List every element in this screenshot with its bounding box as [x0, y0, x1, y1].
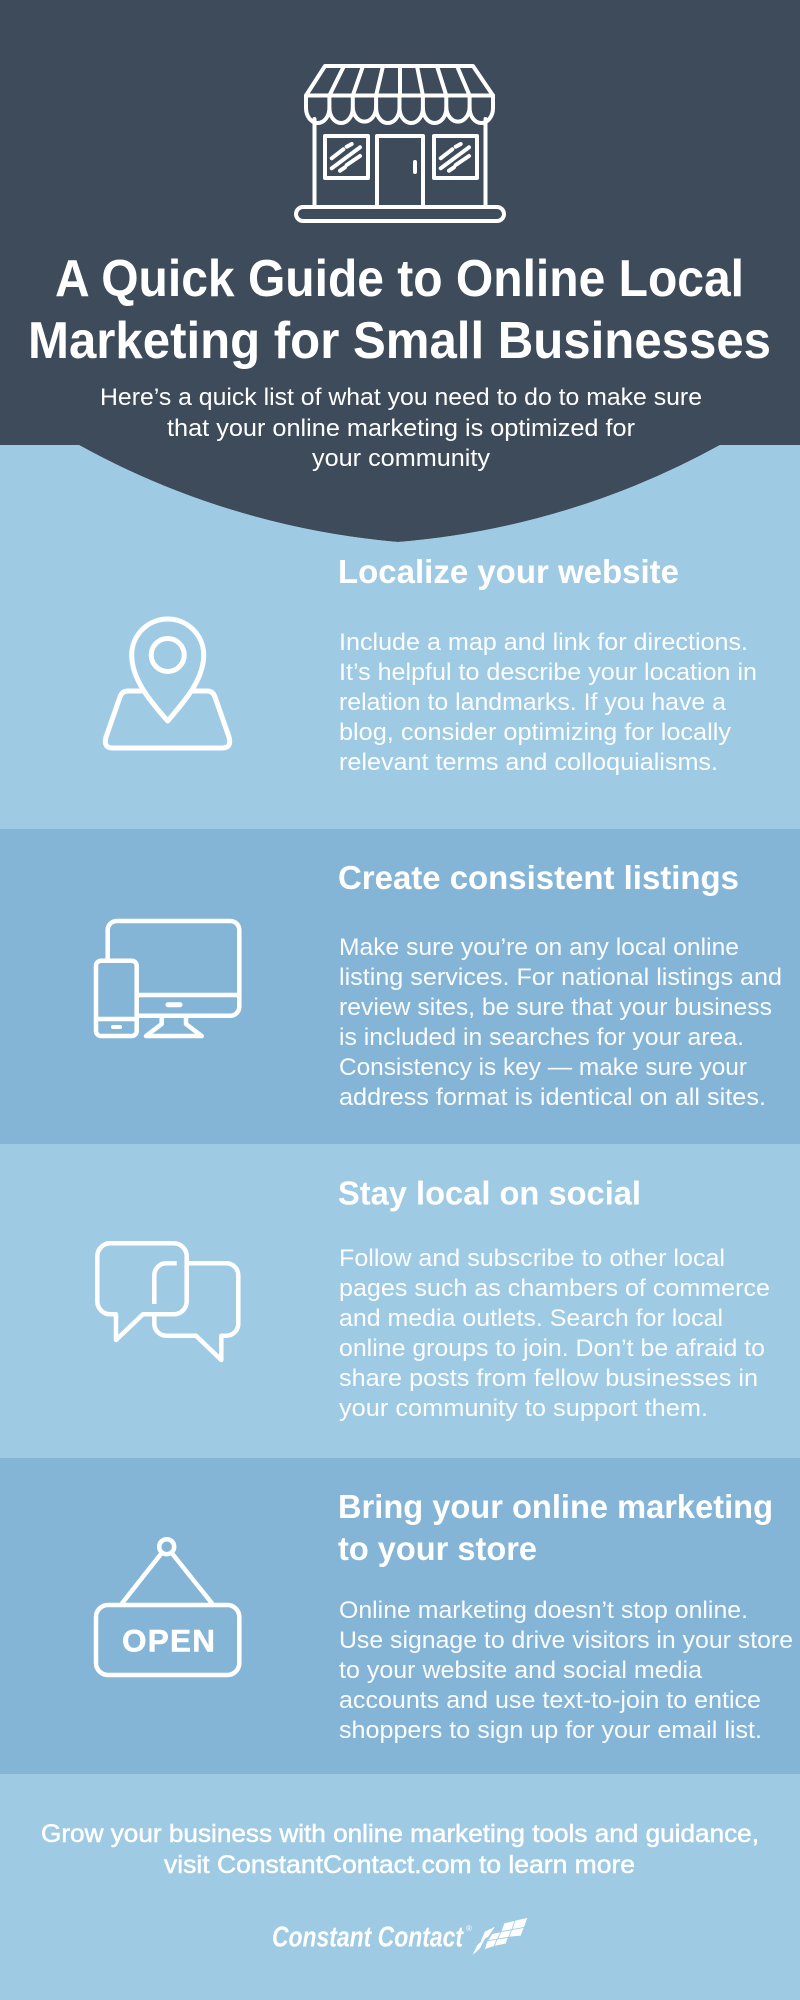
logo: Constant Contact: Constant Contact	[272, 1922, 464, 1954]
icon: map pin	[105, 619, 230, 748]
panel background	[0, 445, 800, 829]
header panel	[0, 0, 800, 542]
panel background	[0, 1144, 800, 1458]
subtitle: your community	[312, 445, 491, 472]
panel background	[0, 1458, 800, 1774]
body text: relation to landmarks. If you have a	[339, 689, 727, 716]
body text: Use signage to drive visitors in your store	[339, 1627, 793, 1654]
call to action text: visit ConstantContact.com to learn more	[164, 1851, 635, 1879]
panel: stay local on social	[0, 1144, 800, 1458]
icon: chat bubbles	[97, 1243, 238, 1360]
subtitle: Here’s a quick list of what you need to do to make sure	[100, 384, 702, 411]
heading: to your store	[338, 1530, 537, 1567]
subtitle	[100, 384, 702, 472]
panel: bring your online marketing to your store	[0, 1458, 800, 1774]
body text: share posts from fellow businesses in	[339, 1365, 758, 1392]
heading: Stay local on social	[338, 1174, 641, 1212]
body text	[339, 1245, 770, 1422]
heading: Bring your online marketing	[338, 1488, 773, 1525]
body text: Online marketing doesn’t stop online.	[339, 1597, 748, 1624]
footer background	[0, 1774, 800, 2000]
body text	[339, 1597, 793, 1744]
subtitle: that your online marketing is optimized for	[167, 415, 635, 442]
heading: Create consistent listings	[338, 859, 739, 896]
body text: It’s helpful to describe your location in	[339, 659, 757, 686]
icon: open sign: OPEN	[122, 1623, 215, 1659]
title: Marketing for Small Businesses	[28, 312, 771, 370]
panel: create consistent listings	[0, 829, 800, 1144]
body text: and media outlets. Search for local	[339, 1305, 723, 1332]
panel background	[0, 829, 800, 1144]
heading	[338, 1488, 773, 1567]
body text: Follow and subscribe to other local	[339, 1245, 725, 1272]
icon: storefront	[296, 66, 504, 221]
body text: is included in searches for your area.	[339, 1024, 744, 1051]
logo: Constant Contact: ®	[466, 1924, 472, 1933]
body text: listing services. For national listings and	[339, 964, 782, 991]
body text: review sites, be sure that your business	[339, 994, 772, 1021]
body text: online groups to join. Don’t be afraid to	[339, 1335, 765, 1362]
icon: devices	[96, 921, 239, 1036]
heading: Localize your website	[338, 553, 679, 590]
call to action text: Grow your business with online marketing tools and guidance,	[41, 1820, 759, 1848]
body text: Include a map and link for directions.	[339, 629, 748, 656]
body text: accounts and use text-to-join to entice	[339, 1687, 761, 1714]
body text: to your website and social media	[339, 1657, 703, 1684]
call to action text	[41, 1820, 759, 1879]
body text: pages such as chambers of commerce	[339, 1275, 770, 1302]
panel: localize your website	[0, 445, 800, 829]
title	[28, 250, 771, 370]
body text	[339, 934, 782, 1111]
title: A Quick Guide to Online Local	[55, 250, 744, 308]
body text: blog, consider optimizing for locally	[339, 719, 731, 746]
body text: shoppers to sign up for your email list.	[339, 1717, 762, 1744]
header background	[0, 0, 800, 542]
body text: address format is identical on all sites.	[339, 1084, 766, 1111]
body text: your community to support them.	[339, 1395, 708, 1422]
panel: footer call to action	[0, 1774, 800, 2000]
icon: open sign	[96, 1539, 239, 1675]
body text: Consistency is key — make sure your	[339, 1054, 747, 1081]
body text: relevant terms and colloquialisms.	[339, 749, 718, 776]
body text: Make sure you’re on any local online	[339, 934, 739, 961]
body text	[339, 629, 757, 776]
